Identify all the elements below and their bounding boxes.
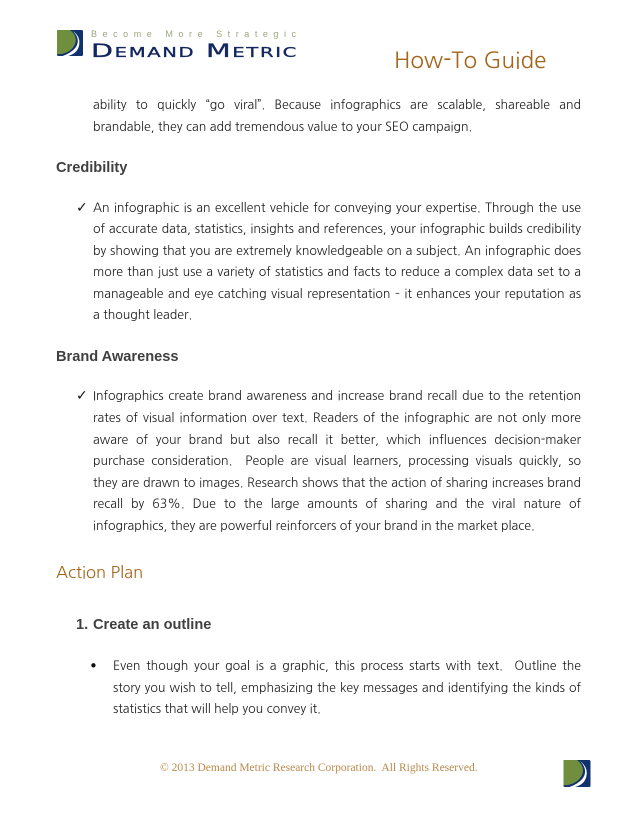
- credibility paragraph: more than just use a variety of statistics and facts to reduce a complex data set to a: [93, 265, 581, 278]
- brand awareness paragraph: rates of visual information over text. Readers of the infographic are not only more: [93, 411, 581, 424]
- heading: Brand Awareness: Brand Awareness: [56, 349, 178, 365]
- numbered heading: Create an outline: Create an outline: [93, 617, 211, 633]
- footer copyright: © 2013 Demand Metric Research Corporation. All Rights Reserved.: [160, 762, 478, 774]
- logo: Demand Metric: [57, 29, 302, 62]
- continued paragraph: [93, 98, 581, 133]
- brand awareness paragraph: infographics, they are powerful reinforcers of your brand in the market place.: [93, 519, 535, 532]
- page title: How-To Guide: [394, 50, 546, 72]
- tagline: Become More Strategic: [91, 29, 302, 39]
- outline bullet: •: [89, 657, 98, 675]
- credibility paragraph: of accurate data, statistics, insights and references, your infographic builds credibility: [93, 222, 581, 235]
- brand awareness paragraph: [76, 388, 581, 532]
- outline bullet: Even though your goal is a graphic, this process starts with text. Outline the: [113, 659, 581, 672]
- credibility paragraph: An infographic is an excellent vehicle for conveying your expertise. Through the use: [93, 201, 581, 214]
- heading: Credibility: Credibility: [56, 160, 127, 176]
- footer logo: [564, 760, 590, 787]
- brand awareness paragraph: Infographics create brand awareness and increase brand recall due to the retention: [93, 389, 581, 402]
- brand awareness paragraph: purchase consideration. People are visual learners, processing visuals quickly, so: [93, 454, 581, 467]
- credibility paragraph: manageable and eye catching visual representation – it enhances your reputation as: [93, 287, 581, 300]
- credibility paragraph: a thought leader.: [93, 308, 192, 321]
- continued paragraph: brandable, they can add tremendous value to your SEO campaign.: [93, 120, 472, 133]
- brand awareness paragraph: aware of your brand but also recall it better, which influences decision-maker: [93, 433, 581, 446]
- credibility paragraph: [76, 200, 581, 321]
- section heading: Action Plan: Action Plan: [56, 565, 143, 581]
- outline bullet: [89, 657, 581, 715]
- outline bullet: story you wish to tell, emphasizing the key messages and identifying the kinds of: [113, 681, 581, 694]
- credibility paragraph: ✓: [76, 200, 88, 216]
- numbered heading: Create an outline: 1.: [76, 617, 88, 633]
- wordmark: Demand Metric: [91, 40, 298, 62]
- brand awareness paragraph: they are drawn to images. Research shows that the action of sharing increases brand: [93, 476, 581, 489]
- brand awareness paragraph: recall by 63%. Due to the large amounts of sharing and the viral nature of: [93, 497, 581, 510]
- brand awareness paragraph: ✓: [76, 388, 88, 404]
- continued paragraph: ability to quickly “go viral”. Because infographics are scalable, shareable and: [93, 98, 581, 111]
- logo mark: [57, 30, 83, 56]
- outline bullet: statistics that will help you convey it.: [113, 702, 321, 715]
- credibility paragraph: by showing that you are extremely knowledgeable on a subject. An infographic does: [93, 244, 581, 257]
